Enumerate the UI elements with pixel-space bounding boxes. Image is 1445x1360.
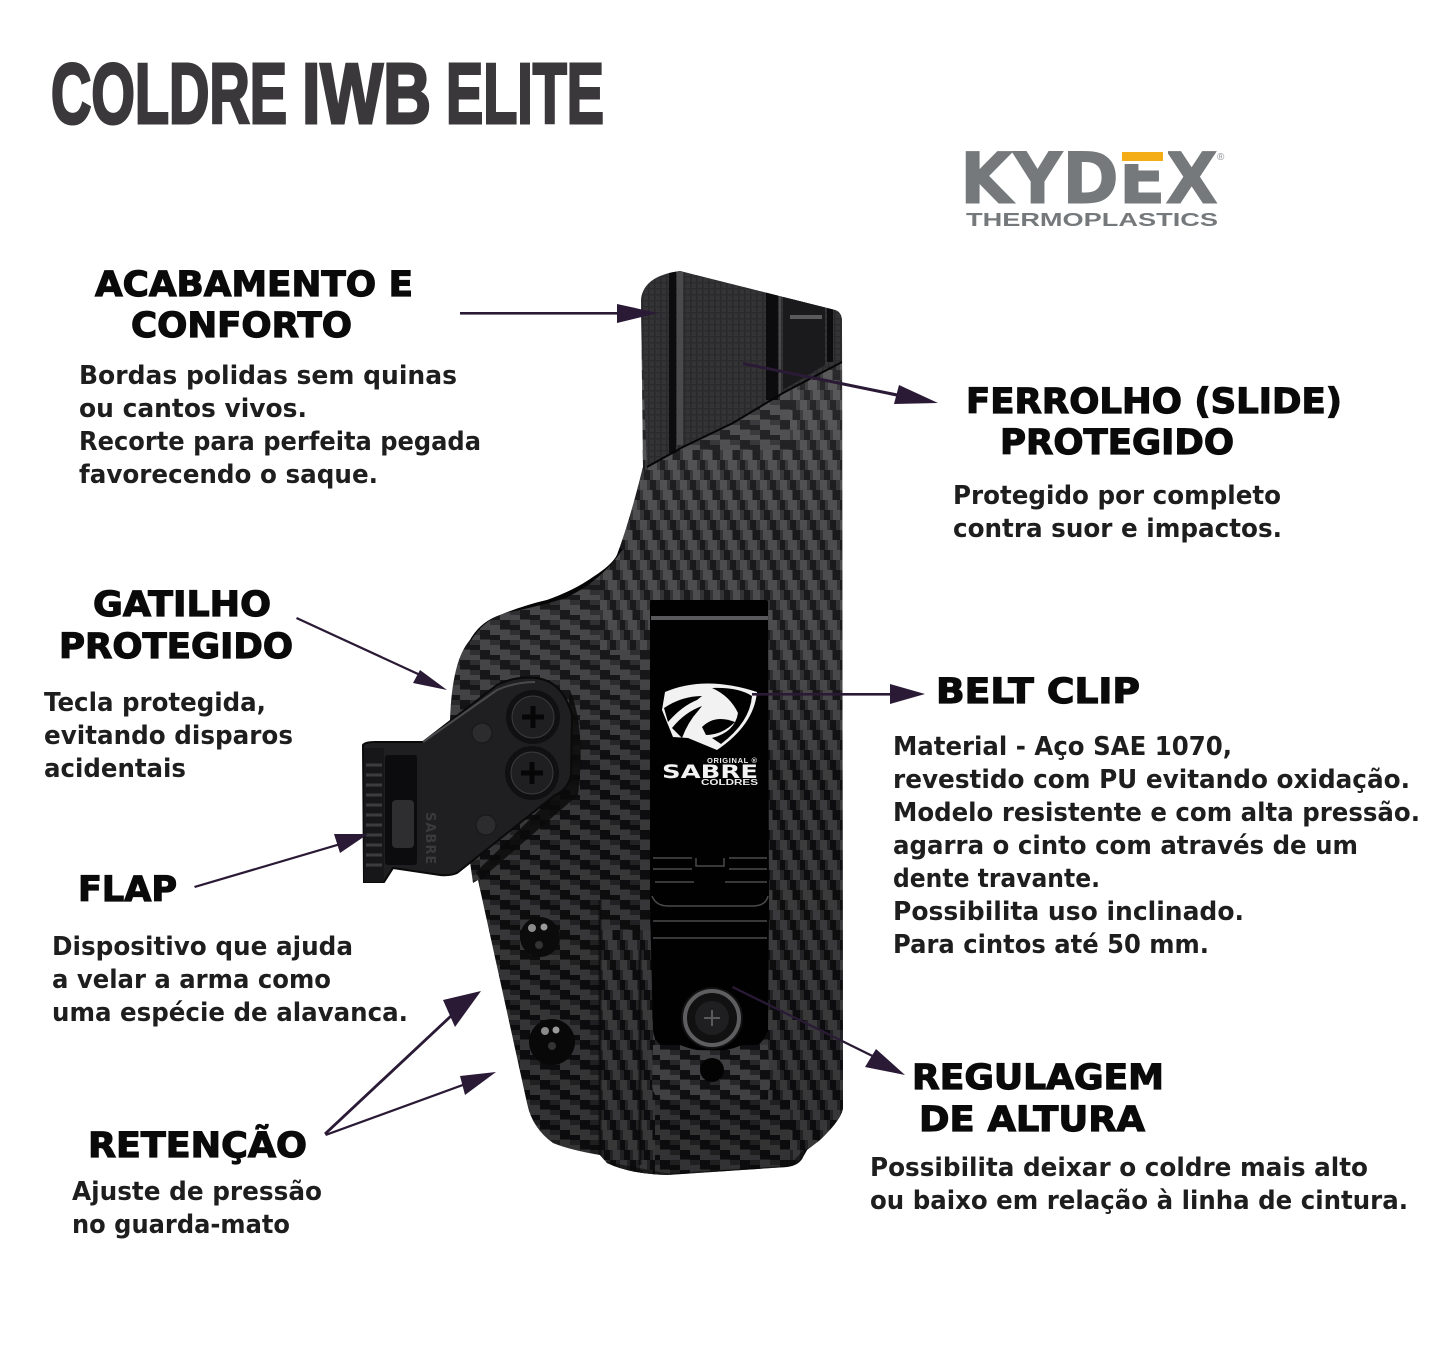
description: ou cantos vivos. [79, 394, 307, 424]
block: flap [52, 870, 408, 1028]
logo: Kydex Thermoplastics: KYDEX [960, 138, 1218, 220]
description: acidentais [44, 754, 186, 784]
heading: DE ALTURA [919, 1100, 1145, 1140]
block: regulagem de altura [870, 1058, 1408, 1216]
logo: Sabre shield: SABRE [662, 761, 758, 783]
heading [95, 265, 413, 346]
description: Recorte para perfeita pegada [79, 427, 481, 457]
heading: FERROLHO (SLIDE) [966, 382, 1342, 422]
holster shell: carbon fibre [440, 260, 860, 1190]
retention rivet lower [529, 1019, 575, 1065]
arrows: retencao [324, 991, 496, 1136]
description: contra suor e impactos. [953, 514, 1282, 544]
heading: ACABAMENTO E [95, 265, 413, 305]
slide section [640, 265, 842, 467]
logo: Kydex Thermoplastics: ® [1217, 152, 1225, 163]
description: revestido com PU evitando oxidação. [893, 765, 1410, 795]
arrow: acabamento [460, 304, 658, 323]
arrow: flap [194, 834, 368, 888]
arrow: belt clip [752, 684, 925, 704]
description: no guarda-mato [72, 1210, 290, 1240]
belt clip [650, 600, 769, 1050]
description: Dispositivo que ajuda [52, 932, 353, 962]
holster illustration [363, 260, 860, 1190]
description: Possibilita uso inclinado. [893, 897, 1244, 927]
retention rivet upper [520, 917, 560, 957]
flap: SABRE [422, 812, 437, 865]
heading: PROTEGIDO [1000, 423, 1234, 463]
heading: BELT CLIP [936, 672, 1140, 712]
arrow: gatilho [296, 617, 447, 690]
description [870, 1153, 1408, 1216]
heading: CONFORTO [131, 306, 352, 346]
logo: Kydex Thermoplastics: THERMOPLASTICS [966, 210, 1218, 230]
title: IWB [302, 47, 431, 142]
description [72, 1177, 322, 1240]
heading [59, 585, 293, 667]
flap [363, 678, 572, 882]
mounting hole [700, 1058, 724, 1082]
description [953, 481, 1282, 544]
description: uma espécie de alavanca. [52, 998, 408, 1028]
logo: Sabre shield: COLDRES [701, 778, 759, 787]
heading [966, 382, 1342, 463]
heading: REGULAGEM [912, 1058, 1164, 1098]
block: acabamento e conforto [79, 265, 481, 490]
description: Protegido por completo [953, 481, 1281, 511]
title: COLDRE [51, 47, 287, 142]
description: agarra o cinto com através de um [893, 831, 1358, 861]
logo: Sabre shield: ORIGINAL ® [707, 756, 757, 765]
description: evitando disparos [44, 721, 293, 751]
description: Tecla protegida, [44, 688, 266, 718]
description: ou baixo em relação à linha de cintura. [870, 1186, 1408, 1216]
block: belt clip [893, 672, 1420, 960]
description [79, 361, 481, 490]
description: Modelo resistente e com alta pressão. [893, 798, 1420, 828]
arrow: regulagem [732, 986, 905, 1075]
description [44, 688, 293, 784]
description [893, 732, 1420, 960]
description: a velar a arma como [52, 965, 331, 995]
title: ELITE [446, 47, 604, 142]
flap screw upper [506, 690, 560, 744]
description: Bordas polidas sem quinas [79, 361, 457, 391]
block: ferrolho protegido [953, 382, 1342, 544]
heading: FLAP [78, 870, 177, 910]
height adjustment screw [681, 987, 743, 1049]
flap screw lower [505, 746, 559, 800]
carbon pocket under clip [652, 1045, 770, 1100]
description: Para cintos até 50 mm. [893, 930, 1209, 960]
arrow: ferrolho [743, 362, 938, 404]
title [51, 47, 604, 142]
description: Ajuste de pressão [72, 1177, 322, 1207]
block: retencao [72, 1124, 322, 1240]
logo: Sabre shield [662, 684, 759, 787]
heading [912, 1058, 1164, 1140]
description [52, 932, 408, 1028]
heading: PROTEGIDO [59, 627, 293, 667]
block: gatilho protegido [44, 585, 293, 784]
description: favorecendo o saque. [79, 460, 378, 490]
description: dente travante. [893, 864, 1100, 894]
heading: RETENÇÃO [88, 1124, 307, 1166]
heading: GATILHO [93, 585, 271, 625]
description: Possibilita deixar o coldre mais alto [870, 1153, 1368, 1183]
description: Material - Aço SAE 1070, [893, 732, 1232, 762]
